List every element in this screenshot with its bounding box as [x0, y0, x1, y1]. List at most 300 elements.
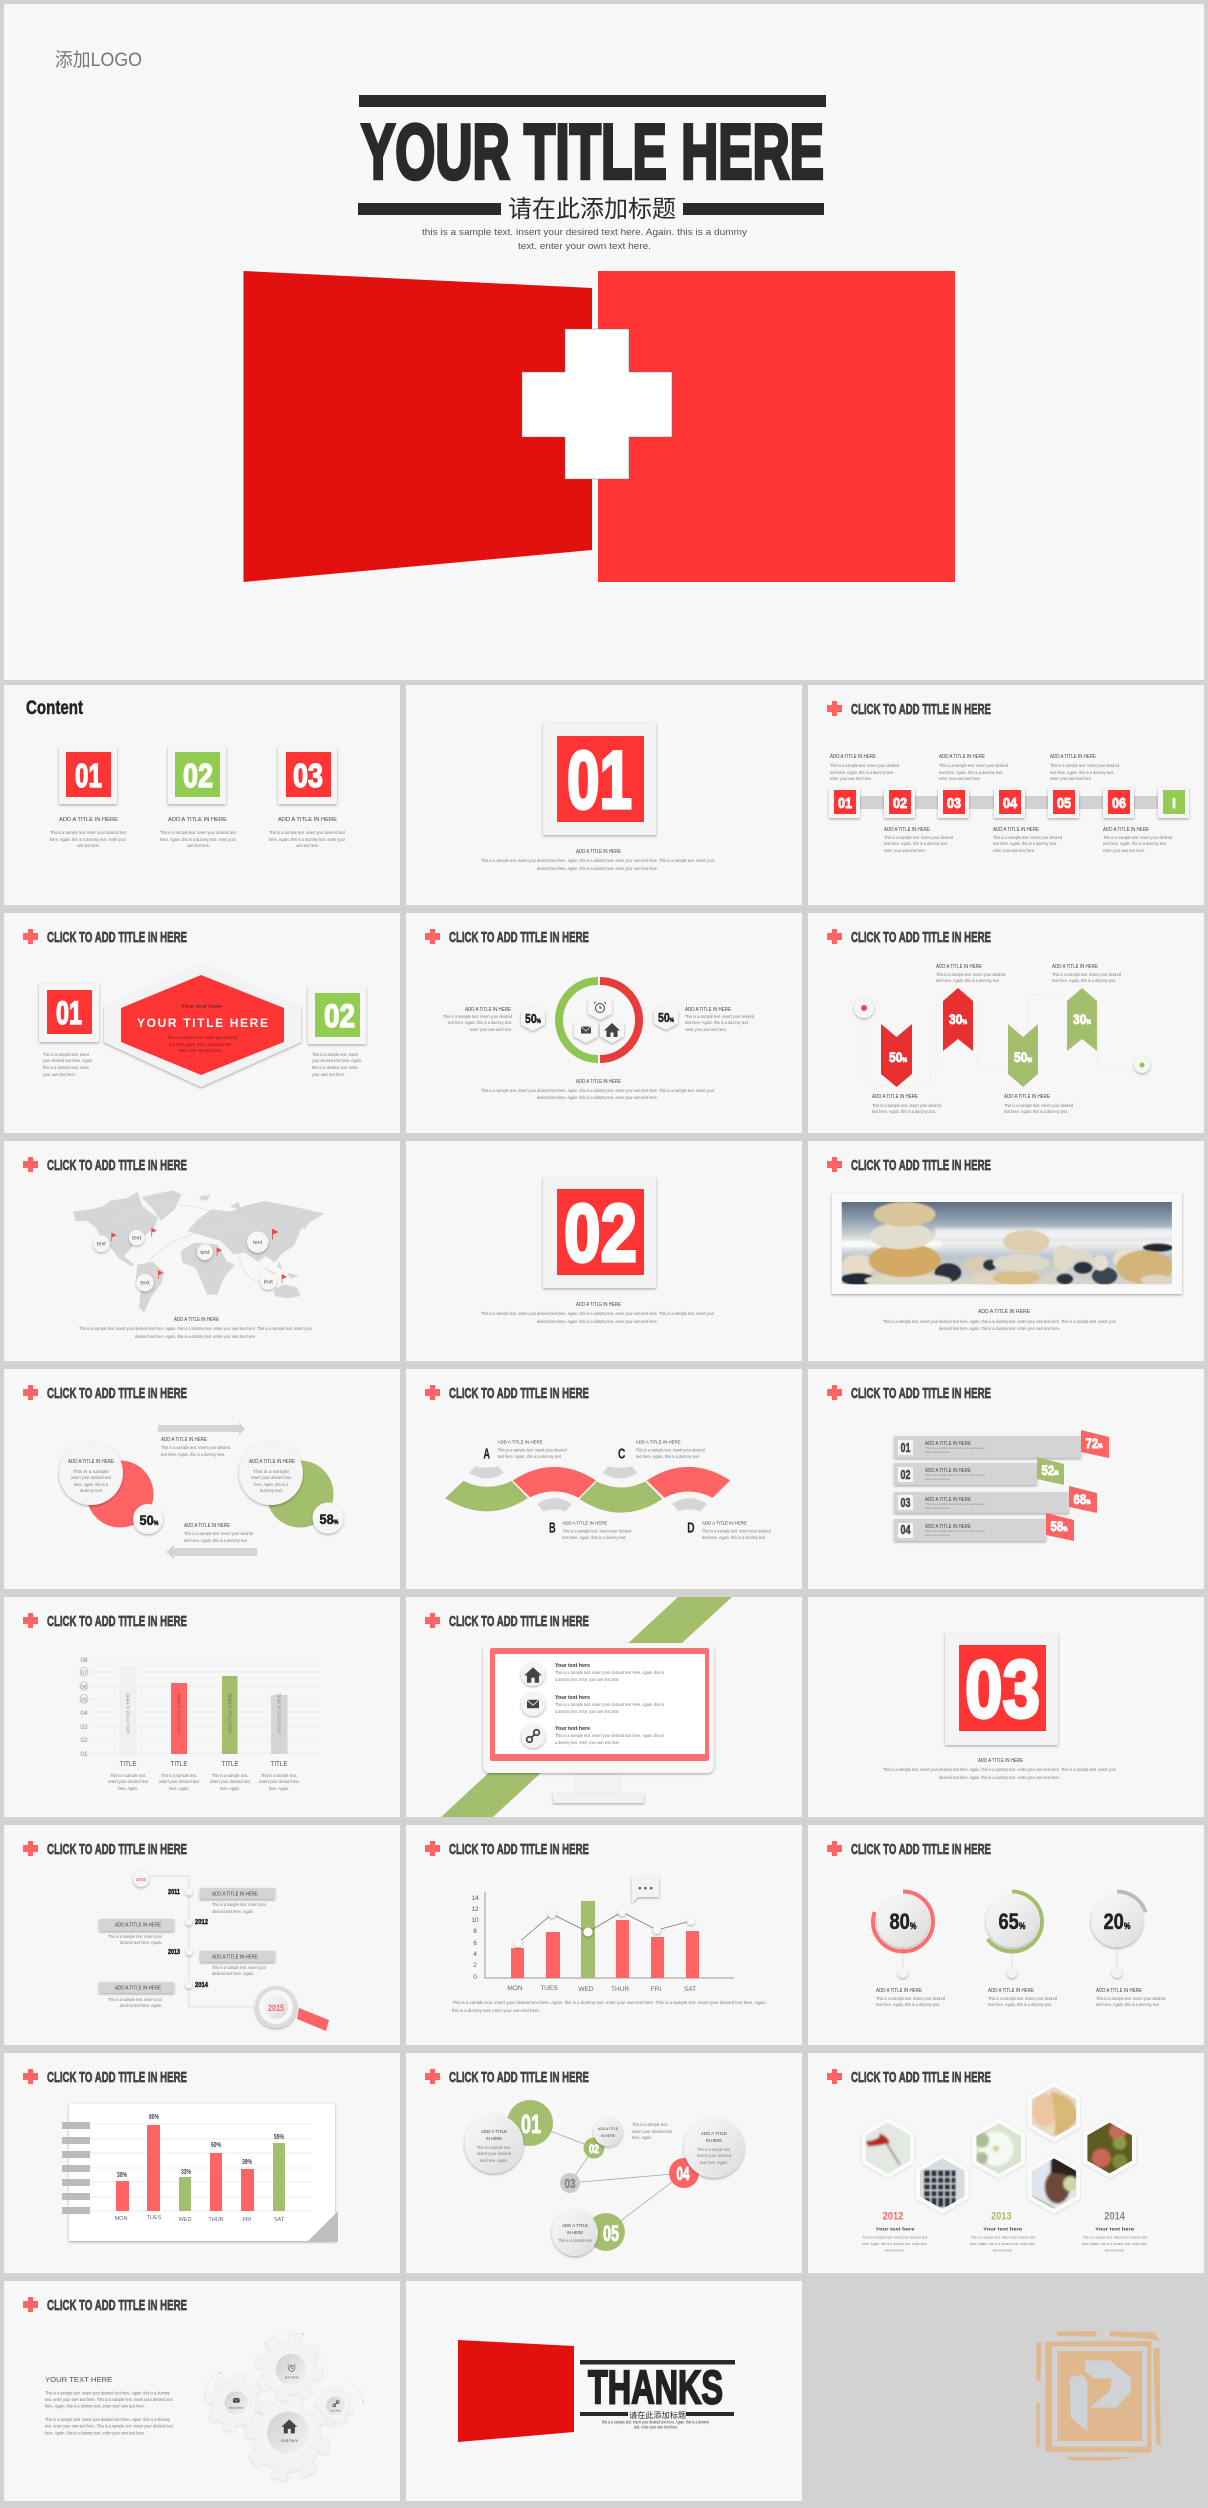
gears text block: here. Again. this is a dummy text. enter your own text here.: [45, 2430, 145, 2435]
wave captions: ADD A TITLE IN HERE: [636, 1439, 681, 1445]
panel: donut percentages: [808, 1825, 1204, 2045]
photo frame: [832, 1193, 1182, 1294]
monitor row: home: Your text here: [555, 1663, 590, 1669]
notebook sheet: [69, 2104, 338, 2242]
wave captions: This is a sample text. insert your desired: [498, 1448, 567, 1453]
thanks title block: THANKS: [588, 2360, 723, 2414]
panel: monitor: [406, 1597, 802, 1817]
column captions: here. Again.: [169, 1786, 189, 1791]
two colour ring: [559, 981, 639, 1059]
ribbon 50% green: 50%: [1014, 1049, 1033, 1065]
timeline steps: 02: [893, 795, 907, 812]
section text: This is a sample text. insert your desired text here. Again. this is a dummy text. enter your own text here. This is a sample text. insert your: [883, 1767, 1116, 1772]
right caption: text here. Again. this is a dummy text.: [685, 1020, 749, 1025]
red circle group: 50%: [140, 1512, 159, 1528]
hex captions 2013: here. Again. this is a dummy text. enter your: [970, 2241, 1036, 2246]
right text: your own text here.: [312, 1072, 345, 1077]
slide title: CLICK TO ADD TITLE IN HERE: [47, 2069, 187, 2086]
photo caption: This is a sample text. insert your desired text here. Again. this is a dummy text. enter your own text here. This is a sample text. insert your: [883, 1319, 1116, 1324]
year 2012 entry: ADD A TITLE IN HERE: [115, 1922, 162, 1928]
chart grid and axis: 06: [80, 1684, 88, 1691]
axes: 2: [473, 1962, 477, 1969]
timeline steps: 01: [838, 795, 852, 812]
menu item 02: own text here.: [187, 843, 210, 848]
axes: [471, 1892, 734, 1981]
node 01: 01: [521, 2109, 541, 2139]
chart grid and axis: 01: [80, 1751, 88, 1758]
panel: diamond comparison: [4, 913, 400, 1133]
right text: your desired text here. Again.: [312, 1058, 362, 1063]
wave captions: ADD A TITLE IN HERE: [702, 1520, 748, 1526]
left caption: ADD A TITLE IN HERE: [465, 1007, 512, 1013]
big number card 01: 01: [567, 735, 632, 826]
line series: [514, 1908, 695, 1947]
menu item 02: This is a sample text. insert your desired text: [160, 830, 237, 835]
panel: gears: [4, 2281, 400, 2501]
chart grid and axis: 03: [80, 1724, 88, 1731]
timeline steps: 05: [1057, 795, 1071, 812]
hex captions 2014: here. Again. this is a dummy text. enter your: [1082, 2241, 1148, 2246]
cover title block: 请在此添加标题: [508, 196, 676, 223]
wave captions: C: [618, 1446, 626, 1462]
left text: This is a sample text. insert: [43, 1052, 90, 1057]
big number card 01: [543, 723, 656, 835]
node 01: [464, 2100, 553, 2174]
bottom caption: ADD A TITLE IN HERE: [576, 1079, 622, 1085]
timeline captions top: [830, 754, 1119, 781]
wave captions: This is a sample text. insert your desired: [636, 1448, 705, 1453]
timeline captions top: enter your own text here.: [939, 776, 981, 781]
slide title: [425, 2069, 589, 2086]
panel: ribbons: [808, 913, 1204, 1133]
slide title: [827, 929, 991, 946]
timeline captions bottom: enter your own text here.: [884, 848, 926, 853]
slide title: [827, 701, 991, 718]
slide title: [827, 1157, 991, 1174]
timeline captions bottom: enter your own text here.: [993, 848, 1035, 853]
thanks title block: [580, 2360, 735, 2420]
year 2011 entry: desired text here. Again.: [212, 1909, 254, 1914]
slide title: [23, 2297, 187, 2314]
section text: desired text here. Again. this is a dummy text. enter your own text here.: [537, 1319, 658, 1324]
slide title: CLICK TO ADD TITLE IN HERE: [47, 1157, 187, 1174]
x axis labels: TUES: [147, 2215, 162, 2221]
menu item 01: here. Again. this is a dummy text. enter your: [50, 837, 126, 842]
gears text block: text. enter your own text here. This is a sample text. insert your desired text: [45, 2424, 173, 2429]
bar value labels: 55%: [274, 2134, 285, 2141]
hex photo: red flower: [861, 2118, 915, 2178]
gear: mail: text here: [229, 2406, 243, 2410]
panel: world map: [4, 1141, 400, 1361]
chart grid and axis: 02: [80, 1737, 88, 1744]
year 2013 entry: ADD A TITLE IN HERE: [212, 1954, 259, 1960]
timeline captions top: enter your own text here.: [830, 776, 872, 781]
card 02: [308, 987, 366, 1044]
panel: combo chart: [406, 1825, 802, 2045]
donut 65%: ADD A TITLE IN HERE: [988, 1988, 1035, 1994]
section text: [481, 849, 714, 871]
node 04: ADD A TITLE: [701, 2131, 727, 2137]
timeline captions top: This is a sample text. insert your desired: [1050, 763, 1119, 768]
slide title: CLICK TO ADD TITLE IN HERE: [449, 2069, 589, 2086]
left caption: This is a sample text. insert your desired: [443, 1014, 512, 1019]
green circle group: insert your desired text: [251, 1475, 292, 1480]
arrow captions: text here. Again. this is a dummy text.: [184, 1538, 248, 1543]
column 3: ADD A TITLE IN HERE: [228, 1693, 232, 1734]
red circle group: This is a sample: [73, 1469, 110, 1474]
bar 02 52%: 52%: [1042, 1462, 1059, 1478]
bar 01 72%: ADD A TITLE IN HERE: [925, 1441, 972, 1447]
column 2: [171, 1683, 187, 1754]
left percentage hexagon: [521, 1005, 545, 1031]
slide title: CLICK TO ADD TITLE IN HERE: [449, 1613, 589, 1630]
map caption: [79, 1317, 312, 1339]
right caption: ADD A TITLE IN HERE: [685, 1007, 732, 1013]
green circle group: [239, 1441, 344, 1534]
grid: [90, 2124, 312, 2211]
slide title: [425, 1385, 589, 1402]
slide title: [23, 1841, 187, 1858]
bar 02 52%: This is a sample text. insert your desired text: [925, 1473, 985, 1477]
wave captions: text here. Again. this is a dummy text: [498, 1454, 562, 1459]
ribbon captions: [872, 964, 1121, 1114]
year 2014 entry: desired text here. Again.: [120, 2003, 162, 2008]
bar 02 52%: ADD A TITLE IN HERE: [925, 1468, 972, 1474]
donut 20%: 20%: [1104, 1909, 1131, 1934]
cover subtitle text: this is a sample text. insert your desired text here. Again. this is a dummy: [422, 227, 747, 238]
node 02: here. Again.: [632, 2135, 652, 2140]
monitor row: mail: [521, 1692, 665, 1716]
orbit arcs: [204, 2332, 364, 2479]
connectors: [530, 2123, 684, 2232]
slide title: [425, 929, 589, 946]
bars: [511, 1901, 699, 1978]
year 2011 entry: 2011: [168, 1889, 180, 1896]
bar 02 52%: 02: [900, 1467, 910, 1482]
year 2013 entry: 2013: [168, 1949, 180, 1956]
ribbon captions: ADD A TITLE IN HERE: [872, 1094, 919, 1100]
timeline captions top: ADD A TITLE IN HERE: [830, 754, 877, 760]
red circle group: [59, 1441, 163, 1534]
node 02: insert your desired text: [632, 2129, 673, 2134]
monitor row: link: Your text here: [555, 1726, 590, 1732]
green circle group: ADD A TITLE IN HERE: [249, 1459, 296, 1465]
section text: This is a sample text. insert your desired text here. Again. this is a dummy text. enter your own text here. This is a sample text. insert your: [481, 1311, 714, 1316]
gear: clock: text here: [285, 2376, 299, 2380]
column captions: TITLE: [120, 1761, 137, 1768]
panel: ring with hexagons: [406, 913, 802, 1133]
year 2014 entry: 2014: [195, 1982, 208, 1989]
gear: link: text here: [331, 2409, 342, 2413]
section text: ADD A TITLE IN HERE: [576, 1302, 622, 1308]
photo caption: desired text here. Again. this is a dummy text. enter your own text here.: [939, 1326, 1060, 1331]
big number card 03: 03: [965, 1644, 1040, 1735]
slide title: CLICK TO ADD TITLE IN HERE: [47, 1841, 187, 1858]
donut 20%: ADD A TITLE IN HERE: [1096, 1988, 1143, 1994]
bar 04 58%: ADD A TITLE IN HERE: [925, 1524, 972, 1530]
node 01: IN HERE: [486, 2136, 502, 2142]
section text: ADD A TITLE IN HERE: [978, 1758, 1024, 1764]
timeline captions bottom: enter your own text here.: [1103, 848, 1145, 853]
hex captions 2012: here. Again. this is a dummy text. enter your: [862, 2241, 928, 2246]
wave captions: B: [549, 1520, 556, 1536]
axes: 10: [471, 1917, 479, 1924]
panel: content menu: [4, 685, 400, 905]
x labels: MON: [507, 1985, 523, 1992]
panel: folded bars: [808, 1369, 1204, 1589]
wave captions: text here. Again. this is a dummy text: [636, 1454, 700, 1459]
node 02: [584, 2118, 673, 2158]
x axis labels: FRI: [243, 2217, 252, 2223]
slide title: [425, 1613, 589, 1630]
donut 65%: 65%: [998, 1909, 1026, 1934]
menu item 03: own text here.: [296, 843, 319, 848]
end dot: [1134, 1057, 1150, 1073]
x axis labels: MON: [115, 2216, 127, 2222]
column captions: [108, 1761, 300, 1791]
green circle group: This is a sample: [253, 1469, 290, 1474]
node 03: 03: [564, 2176, 576, 2191]
hex captions 2014: This is a sample text. insert your desired text: [1082, 2234, 1148, 2239]
arrow captions: text here. Again. this is a dummy text.: [161, 1452, 225, 1457]
timeline captions bottom: ADD A TITLE IN HERE: [1103, 827, 1150, 833]
magnifier 2015: 2015: [268, 2003, 284, 2013]
hex captions 2013: [970, 2211, 1036, 2252]
hex captions 2013: own text here.: [993, 2247, 1013, 2252]
map caption: ADD A TITLE IN HERE: [174, 1317, 220, 1323]
notebook rings: [62, 2122, 90, 2214]
arrow captions: ADD A TITLE IN HERE: [161, 1437, 208, 1443]
central hexagon: enter your own text here.: [179, 1048, 222, 1053]
gears text block: [45, 2375, 173, 2435]
year 2013 entry: [168, 1948, 275, 1976]
column captions: This is a sample text.: [212, 1773, 248, 1778]
menu item 03: This is a sample text. insert your desired text: [269, 830, 346, 835]
year 2012 entry: desired text here. Again.: [120, 1940, 162, 1945]
thanks small text: text. enter your own text here.: [634, 2424, 678, 2430]
map text bubbles: text: [140, 1281, 150, 1287]
column captions: here. Again.: [269, 1786, 289, 1791]
chart caption: this is a dummy text. enter your own text here.: [452, 2008, 540, 2013]
year 2011 entry: [168, 1888, 275, 1914]
ribbon captions: text here. Again. this is a dummy text.: [872, 1109, 936, 1114]
timeline captions bottom: ADD A TITLE IN HERE: [884, 827, 931, 833]
slide title: CLICK TO ADD TITLE IN HERE: [851, 701, 991, 718]
x labels: THUR: [611, 1986, 629, 1993]
panel: section 02: [406, 1141, 802, 1361]
red door: [458, 2340, 574, 2442]
ribbon captions: This is a sample text. insert your desired: [872, 1103, 941, 1108]
hex captions 2014: 2014: [1104, 2211, 1126, 2223]
timeline steps: 04: [1003, 795, 1018, 812]
node 05: [552, 2210, 625, 2256]
column 4: ADD A TITLE IN HERE: [276, 1693, 282, 1734]
bar 01 72%: [894, 1430, 1109, 1458]
ribbon 50% red: 50%: [889, 1049, 908, 1065]
menu item 03: 03: [293, 757, 323, 794]
bar 01 72%: here. this is a dummy: [925, 1450, 950, 1454]
node 02: IN HERE: [601, 2133, 615, 2138]
bar 04 58%: 58%: [1050, 1518, 1068, 1534]
green diagonal band: [441, 1597, 732, 1817]
ribbon 50% green: [1008, 1024, 1038, 1087]
central hexagon: Your text here: [181, 1004, 222, 1010]
panel: thanks: [406, 2281, 802, 2501]
menu item 02: 02: [183, 757, 213, 794]
hex captions 2014: [1082, 2211, 1148, 2252]
arrow captions: This is a sample text. insert your desired: [161, 1445, 230, 1450]
year 2012 entry: 2012: [195, 1919, 208, 1926]
cover subtitle text: [422, 227, 747, 252]
left text: this is a dummy text. enter: [43, 1065, 89, 1070]
axes: 8: [473, 1928, 477, 1935]
column captions: This is a sample text.: [110, 1773, 146, 1778]
slide title: [425, 1841, 589, 1858]
year 2014 entry: This is a sample text. insert your: [108, 1997, 162, 2002]
node 01: ADD A TITLE: [481, 2129, 507, 2135]
map text bubbles: [93, 1230, 277, 1291]
monitor row: mail: This is a sample text. insert your desired text here. Again. this is: [555, 1702, 665, 1707]
red circle group: here. Again. this is a: [74, 1482, 108, 1487]
slide title: CLICK TO ADD TITLE IN HERE: [851, 1157, 991, 1174]
left caption: text here. Again. this is a dummy text.: [448, 1020, 512, 1025]
chart grid and axis: 04: [80, 1710, 88, 1717]
column captions: insert your desired text: [210, 1779, 251, 1784]
red circle group: dummy text: [80, 1488, 103, 1493]
node 04: text here. Again.: [700, 2160, 728, 2165]
x axis labels: SAT: [274, 2217, 285, 2223]
monitor row: link: a dummy text. enter your own text here.: [555, 1740, 620, 1745]
magnifier 2015: [255, 1986, 329, 2031]
ribbon 30% red: [943, 988, 973, 1051]
heading: content: Content: [26, 698, 84, 719]
timeline captions top: ADD A TITLE IN HERE: [939, 754, 986, 760]
year 2010: [133, 1871, 149, 1887]
cover title block: [358, 95, 826, 223]
ribbon 30% green: 30%: [1073, 1011, 1092, 1027]
map text bubbles: text: [253, 1240, 263, 1246]
section text: [883, 1758, 1116, 1780]
gear: link: [317, 2389, 351, 2423]
hex captions 2012: own text here.: [885, 2247, 905, 2252]
hex captions 2013: Your text here: [983, 2227, 1022, 2233]
big number card 02: [543, 1177, 656, 1288]
panel: connected circles: [406, 2053, 802, 2273]
monitor row: link: [521, 1724, 665, 1748]
hex captions 2012: This is a sample text. insert your desired text: [862, 2234, 928, 2239]
red circle group: ADD A TITLE IN HERE: [68, 1459, 115, 1465]
card 01: 01: [56, 995, 82, 1031]
bar 03 68%: This is a sample text. insert your desired text: [925, 1502, 985, 1506]
chart caption: [452, 2000, 767, 2013]
slide title: [827, 1385, 991, 1402]
x labels: WED: [578, 1986, 594, 1993]
left text: your own text here.: [43, 1072, 76, 1077]
thanks small text: this is a sample text. insert your desired text here. Again. this is a dummy: [602, 2420, 710, 2424]
gear: clock: [259, 2338, 319, 2398]
section text: ADD A TITLE IN HERE: [576, 849, 622, 855]
map caption: This is a sample text. insert your desired text here. Again. this is a dummy text. enter your own text here. This is a sample text. insert your: [79, 1326, 312, 1331]
slide title: CLICK TO ADD TITLE IN HERE: [851, 1385, 991, 1402]
chart caption: This is a sample text. insert your desired text here. Again. this is a dummy text. enter your own text here. This is a sample text. insert your desired text here. Again.: [452, 2000, 767, 2005]
wave captions: ADD A TITLE IN HERE: [498, 1439, 543, 1445]
hex photo: olive blossom: [1083, 2118, 1136, 2178]
donut 20%: text here. Again. this is a dummy text.: [1096, 2002, 1160, 2007]
node 04: insert your desired: [697, 2153, 732, 2158]
hex captions 2012: Your text here: [875, 2227, 915, 2233]
map text bubbles: text: [132, 1235, 142, 1241]
bar 01 72%: 72%: [1086, 1435, 1103, 1451]
hexagon icons: [574, 994, 624, 1043]
slide title: CLICK TO ADD TITLE IN HERE: [47, 2297, 187, 2314]
donut 80%: ADD A TITLE IN HERE: [876, 1988, 923, 1994]
bar value labels: 80%: [149, 2114, 160, 2121]
hex photo: dark grid bag: [916, 2154, 969, 2214]
column 2: ADD A TITLE IN HERE: [176, 1693, 182, 1734]
bar 01 72%: This is a sample text. insert your desired text: [925, 1446, 985, 1450]
panel: hexagon gallery: [808, 2053, 1204, 2273]
monitor row: home: This is a sample text. insert your desired text here. Again. this is: [555, 1670, 665, 1675]
node 04: IN HERE: [706, 2138, 722, 2144]
card 01: [39, 984, 99, 1042]
donut 65%: This is a sample text. insert your desired: [988, 1996, 1057, 2001]
slide title: CLICK TO ADD TITLE IN HERE: [47, 929, 187, 946]
menu item 01: [50, 747, 127, 848]
hex captions 2014: Your text here: [1095, 2227, 1134, 2233]
photo: stacked stones on beach: [841, 1202, 1175, 1287]
bar 01 72%: 01: [900, 1440, 910, 1455]
node 04: This is a sample text.: [697, 2147, 731, 2152]
green circle group: dummy text: [260, 1488, 283, 1493]
menu item 02: here. Again. this is a dummy text. enter your: [160, 837, 236, 842]
hex captions 2013: 2013: [991, 2211, 1012, 2223]
left red door: [244, 271, 592, 582]
node 04: 04: [676, 2164, 690, 2184]
map caption: desired text here. Again. this is a dummy text. enter your own text here.: [135, 1334, 256, 1339]
red circle group: insert your desired text: [71, 1475, 112, 1480]
arrow captions: [161, 1437, 253, 1543]
hex captions 2012: [862, 2211, 928, 2252]
year 2010: 2010: [136, 1877, 147, 1882]
cover subtitle text: text. enter your own text here.: [518, 241, 651, 252]
donut 20%: [1087, 1892, 1165, 2007]
timeline steps: !: [1172, 795, 1176, 811]
bar 04 58%: here. this is a dummy: [925, 1533, 950, 1537]
gear: home: text here: [281, 2438, 299, 2443]
year 2013 entry: desired text here. Again.: [212, 1971, 254, 1976]
menu item 03: here. Again. this is a dummy text. enter your: [269, 837, 345, 842]
timeline captions bottom: text here. Again. this is a dummy text.: [884, 841, 948, 846]
year 2012 entry: This is a sample text. insert your: [108, 1934, 162, 1939]
white medical cross: [522, 329, 672, 479]
timeline captions bottom: This is a sample text. insert your desired: [884, 835, 953, 840]
arrow captions: ADD A TITLE IN HERE: [184, 1523, 231, 1529]
arrow captions: This is a sample text. insert your desired: [184, 1531, 253, 1536]
column captions: here. Again.: [220, 1786, 240, 1791]
panel: photo banner: [808, 1141, 1204, 1361]
node 02: ADD A TITLE: [598, 2126, 618, 2131]
hex photo: blonde girl: [1027, 2082, 1081, 2142]
thanks small text: [602, 2420, 710, 2430]
connector path: [864, 995, 1134, 1085]
panel: section 03: [808, 1597, 1204, 1817]
central hexagon: YOUR TITLE HERE: [137, 1016, 268, 1030]
menu item 01: own text here.: [77, 843, 100, 848]
ribbon 30% green: [1067, 988, 1097, 1051]
axes: 14: [471, 1895, 479, 1902]
left text: [43, 1052, 93, 1077]
hex captions 2012: 2012: [883, 2211, 903, 2223]
